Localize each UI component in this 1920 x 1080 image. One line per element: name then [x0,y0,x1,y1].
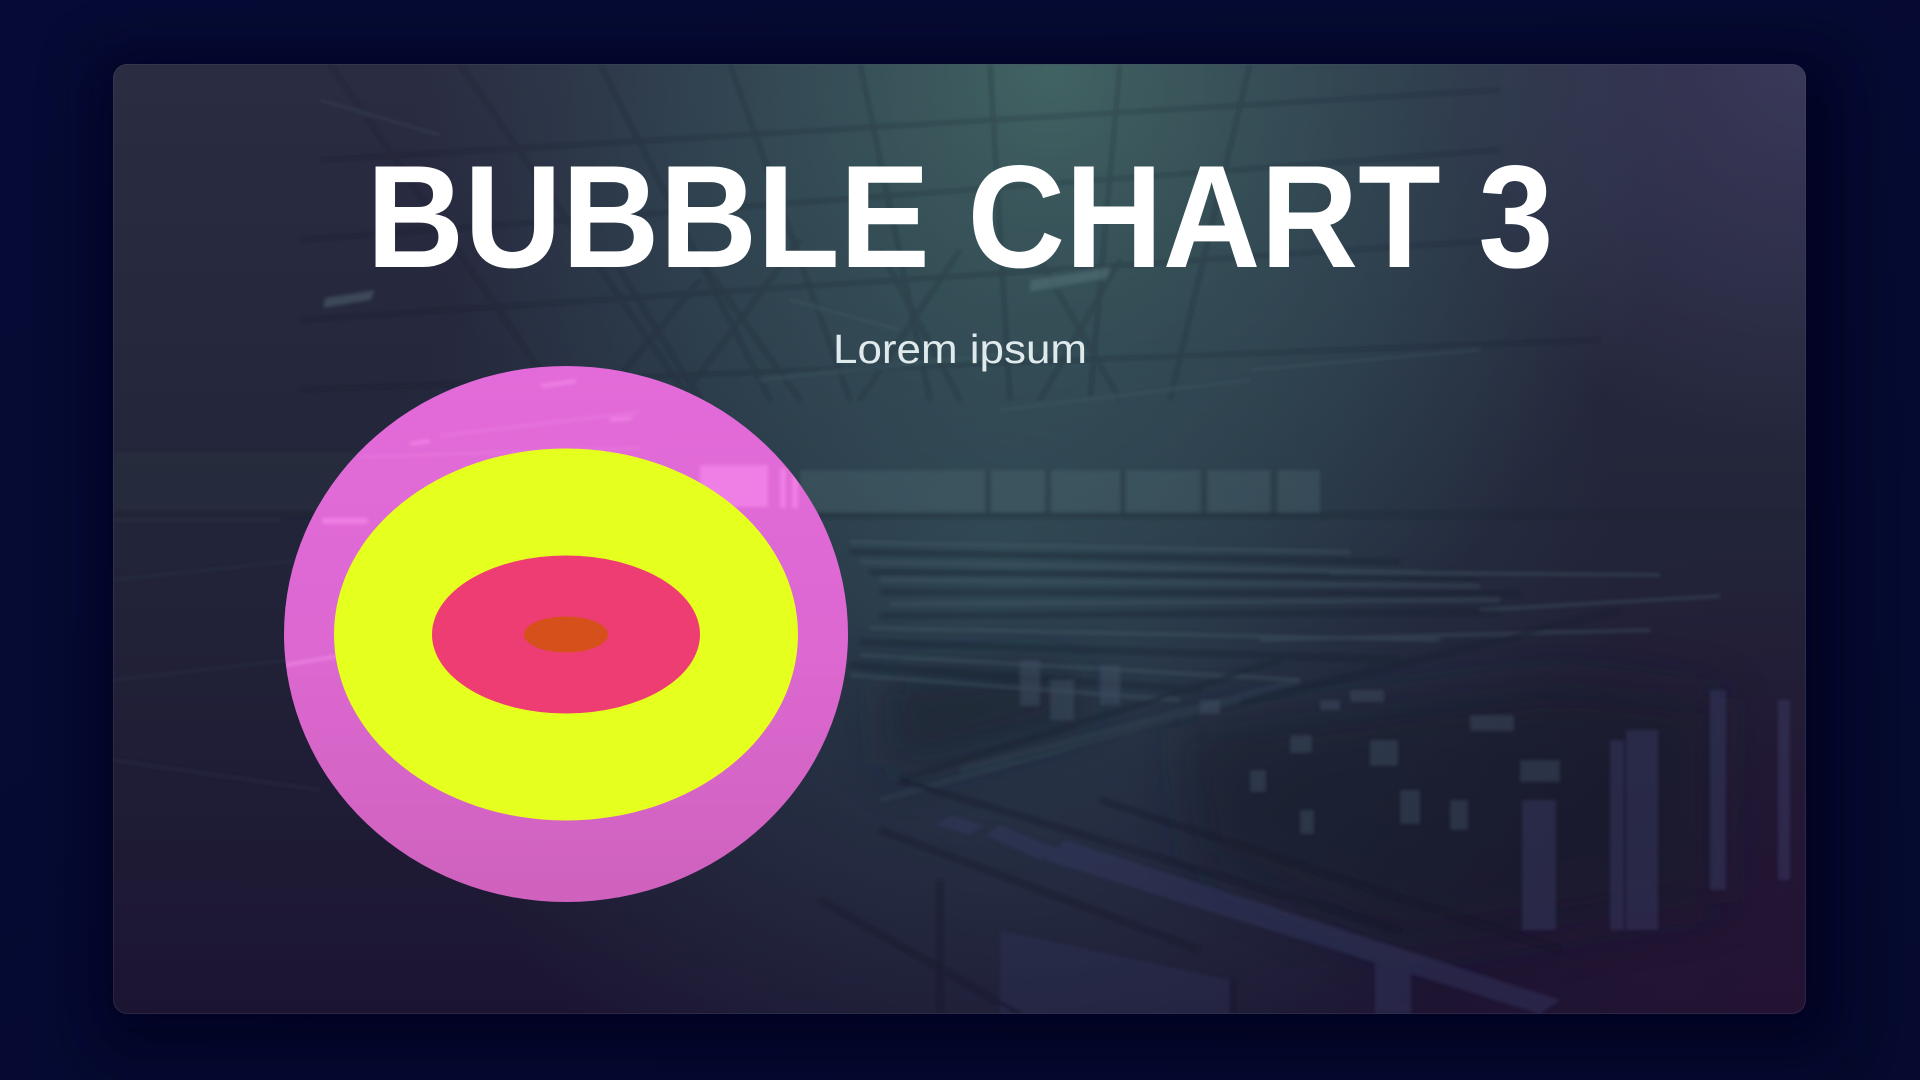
photo: left floor lines [113,520,320,790]
photo: dark machinery shade [885,658,1568,908]
title: BUBBLE CHART 3 [366,135,1554,298]
bubble: orange core [524,616,608,652]
bubble: outer pink [284,366,848,902]
panel edge [114,64,1806,1014]
photo: far wall band [113,452,763,510]
bubble: pink photo highlights [285,379,798,665]
photo: machinery speckle [1020,660,1560,834]
bubble chart [284,366,848,902]
photo: floor conveyors [935,815,1560,1014]
photo: floor rows [850,542,1720,700]
subtitle: Lorem ipsum [833,326,1087,372]
bubble: red [432,556,700,714]
photo: vertical columns [1522,690,1790,930]
panel: warehouse photo [113,64,1806,1014]
bubble: yellow [334,448,798,820]
